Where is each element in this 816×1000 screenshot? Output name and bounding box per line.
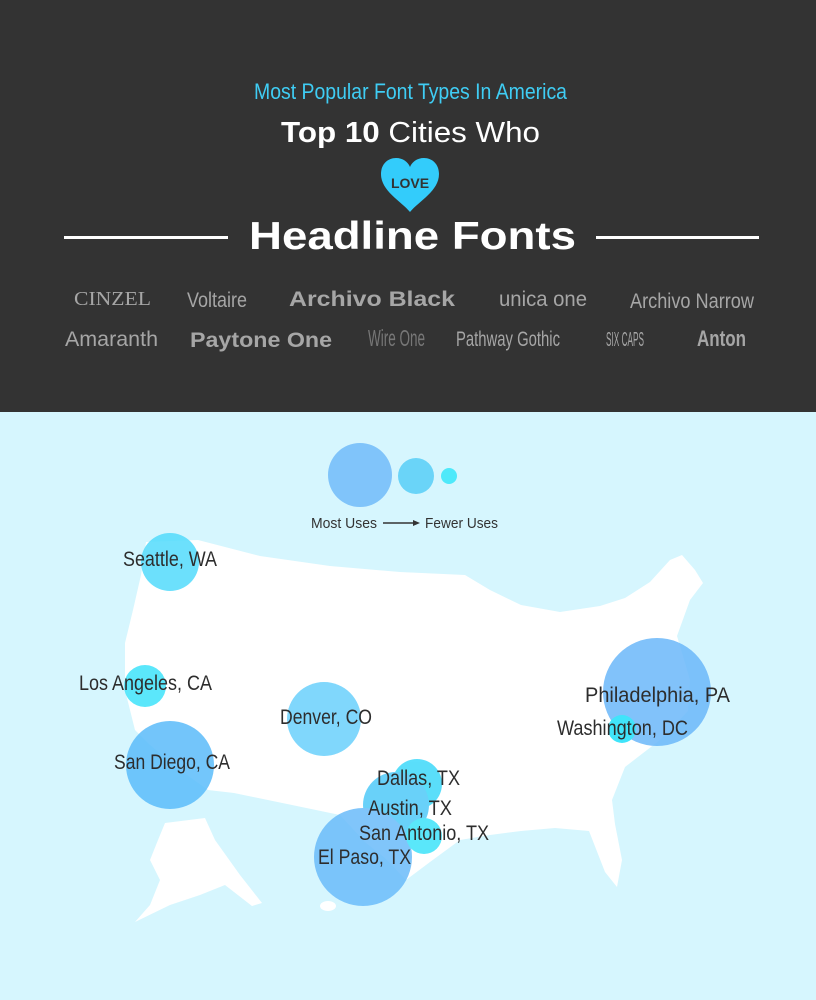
title line 2 with rules: Headline Fonts <box>249 215 576 258</box>
icon: heart love: LOVE <box>391 175 429 191</box>
font name list: Paytone One <box>190 329 332 352</box>
font name list: Anton <box>697 326 746 351</box>
title line 2 with rules <box>64 215 759 258</box>
city labels: San Diego, CA <box>114 751 230 774</box>
font name list: CINZEL <box>74 288 151 310</box>
font name list: Amaranth <box>65 328 158 351</box>
legend: bubble sizes <box>311 443 498 532</box>
font name list: unica one <box>499 288 587 311</box>
city labels: Philadelphia, PA <box>585 684 730 707</box>
font name list: Archivo Narrow <box>630 290 755 313</box>
US map silhouette <box>125 540 703 922</box>
subtitle: Most Popular Font Types In America <box>254 79 568 104</box>
font name list <box>65 288 755 352</box>
map with city bubbles <box>79 443 730 922</box>
city bubbles <box>124 533 711 906</box>
city labels: Dallas, TX <box>377 767 460 790</box>
font name list: SIX CAPS <box>606 329 644 351</box>
city labels: Washington, DC <box>557 717 688 740</box>
font name list: Wire One <box>368 325 425 351</box>
title line 1: Top 10 Cities Who <box>281 117 540 149</box>
city labels: Denver, CO <box>280 706 372 729</box>
font name list: Voltaire <box>187 289 247 312</box>
font name list: Archivo Black <box>289 288 455 311</box>
city labels: San Antonio, TX <box>359 822 489 845</box>
font name list: Pathway Gothic <box>456 328 560 351</box>
legend: bubble sizes: Fewer Uses <box>425 515 498 532</box>
city labels: Seattle, WA <box>123 548 217 571</box>
city labels: Austin, TX <box>368 797 452 820</box>
city labels: Los Angeles, CA <box>79 672 212 695</box>
icon: heart love <box>381 158 439 212</box>
legend: bubble sizes: Most Uses <box>311 515 377 532</box>
city labels: El Paso, TX <box>318 846 411 869</box>
city labels <box>79 548 730 869</box>
header panel <box>0 0 816 412</box>
